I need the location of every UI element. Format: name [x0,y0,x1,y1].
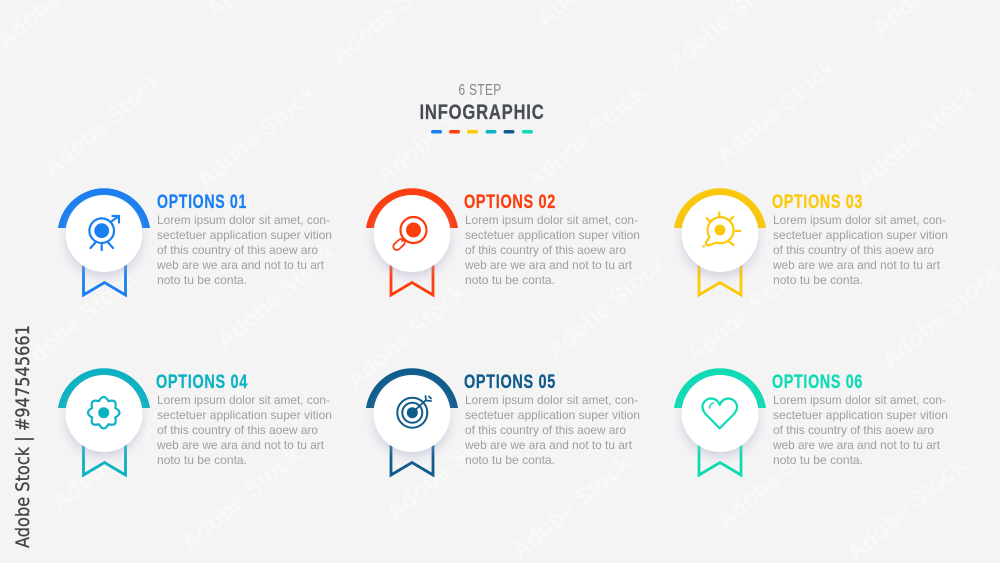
body text 05: sectetuer application super vition [465,408,640,422]
panel: options 01 [58,188,332,295]
watermark pattern: Adobe Stock [39,67,169,183]
watermark pattern: Adobe Stock [12,264,142,380]
watermark pattern: Adobe Stock [682,254,812,370]
ribbon 02 [391,262,433,295]
body text 05: web are we ara and not to tu art [464,438,633,452]
panel: options 06 [674,368,948,475]
icon: heart [703,398,737,428]
ribbon 06 [699,442,741,475]
body text 06: sectetuer application super vition [773,408,948,422]
badge circle 04 [66,375,142,452]
body text 01: of this country of this aoew aro [157,243,318,257]
watermark pattern: Adobe Stock [542,249,672,365]
watermark pattern: Adobe Stock [192,79,322,195]
watermark pattern: Adobe Stock [712,419,842,535]
title 02: OPTIONS 02 [464,192,556,213]
watermark pattern: Adobe Stock [382,411,512,527]
body text 01: web are we ara and not to tu art [156,258,325,272]
body text 06: noto tu be conta. [773,453,863,467]
body text 02 [464,213,640,287]
watermark pattern: Adobe Stock [507,449,637,563]
side credit text: Adobe Stock | #947545661 [12,325,34,548]
body text 05: Lorem ipsum dolor sit amet, con- [465,393,638,407]
arc 05 [366,368,458,408]
watermark pattern: Adobe Stock [47,401,177,517]
title 01: OPTIONS 01 [157,192,247,213]
ribbon 03 [699,262,741,295]
title 03: OPTIONS 03 [772,192,863,213]
body text 04: web are we ara and not to tu art [156,438,325,452]
arc 03 [674,188,766,228]
arc 02 [366,188,458,228]
body text 04: noto tu be conta. [157,453,247,467]
ribbon 01 [84,262,126,295]
watermark pattern: Adobe Stock [177,441,307,557]
body text 01: sectetuer application super vition [157,228,332,242]
watermark pattern: Adobe Stock [372,74,502,190]
badge circle 05 [374,375,450,452]
title 06: OPTIONS 06 [772,372,863,393]
body text 06: of this country of this aoew aro [773,423,934,437]
body text 03: of this country of this aoew aro [773,243,934,257]
title 05: OPTIONS 05 [464,372,556,393]
panel: options 02 [366,188,640,295]
body text 05: noto tu be conta. [465,453,555,467]
badge circle 02 [374,195,450,272]
icon: target with arrow [89,216,119,250]
body text 02: noto tu be conta. [465,273,555,287]
watermark pattern: Adobe Stock [342,279,472,395]
panel: options 03 [674,188,948,295]
body text 01 [156,213,332,287]
arc 04 [58,368,150,408]
body text 02: of this country of this aoew aro [465,243,626,257]
watermark pattern: Adobe Stock [852,79,982,195]
watermark pattern: Adobe Stock [212,239,342,355]
body text 02: Lorem ipsum dolor sit amet, con- [465,213,638,227]
body text 06: web are we ara and not to tu art [772,438,941,452]
badge circle 03 [682,195,758,272]
body text 04: of this country of this aoew aro [157,423,318,437]
title 04: OPTIONS 04 [156,372,248,393]
body text 02: sectetuer application super vition [465,228,640,242]
body text 04 [156,393,332,467]
colour dash row [431,130,533,134]
arc 01 [58,188,150,228]
arc 06 [674,368,766,408]
ribbon 05 [391,442,433,475]
watermark pattern: Adobe Stock [712,54,842,170]
body text 04: Lorem ipsum dolor sit amet, con- [157,393,330,407]
heading: infographic: INFOGRAPHIC [420,100,544,124]
ribbon 04 [84,442,126,475]
panel: options 05 [366,368,640,475]
watermark pattern: Adobe Stock [522,79,652,195]
body text 03: noto tu be conta. [773,273,863,287]
body text 02: web are we ara and not to tu art [464,258,633,272]
heading: 6 step: 6 STEP [458,82,502,99]
body text 03 [772,213,948,287]
body text 01: Lorem ipsum dolor sit amet, con- [157,213,330,227]
icon: flower gear [88,397,119,428]
body text 04: sectetuer application super vition [157,408,332,422]
body text 03: Lorem ipsum dolor sit amet, con- [773,213,946,227]
badge circle 06 [682,375,758,452]
panel: options 04 [58,368,332,475]
body text 05 [464,393,640,467]
body text 06 [772,393,948,467]
icon: bullseye with dart [397,396,431,428]
body text 06: Lorem ipsum dolor sit amet, con- [773,393,946,407]
body text 03: sectetuer application super vition [773,228,948,242]
icon: magnifier [392,217,426,251]
body text 03: web are we ara and not to tu art [772,258,941,272]
body text 01: noto tu be conta. [157,273,247,287]
badge circle 01 [66,195,142,272]
icon: light bulb [704,212,740,246]
body text 05: of this country of this aoew aro [465,423,626,437]
